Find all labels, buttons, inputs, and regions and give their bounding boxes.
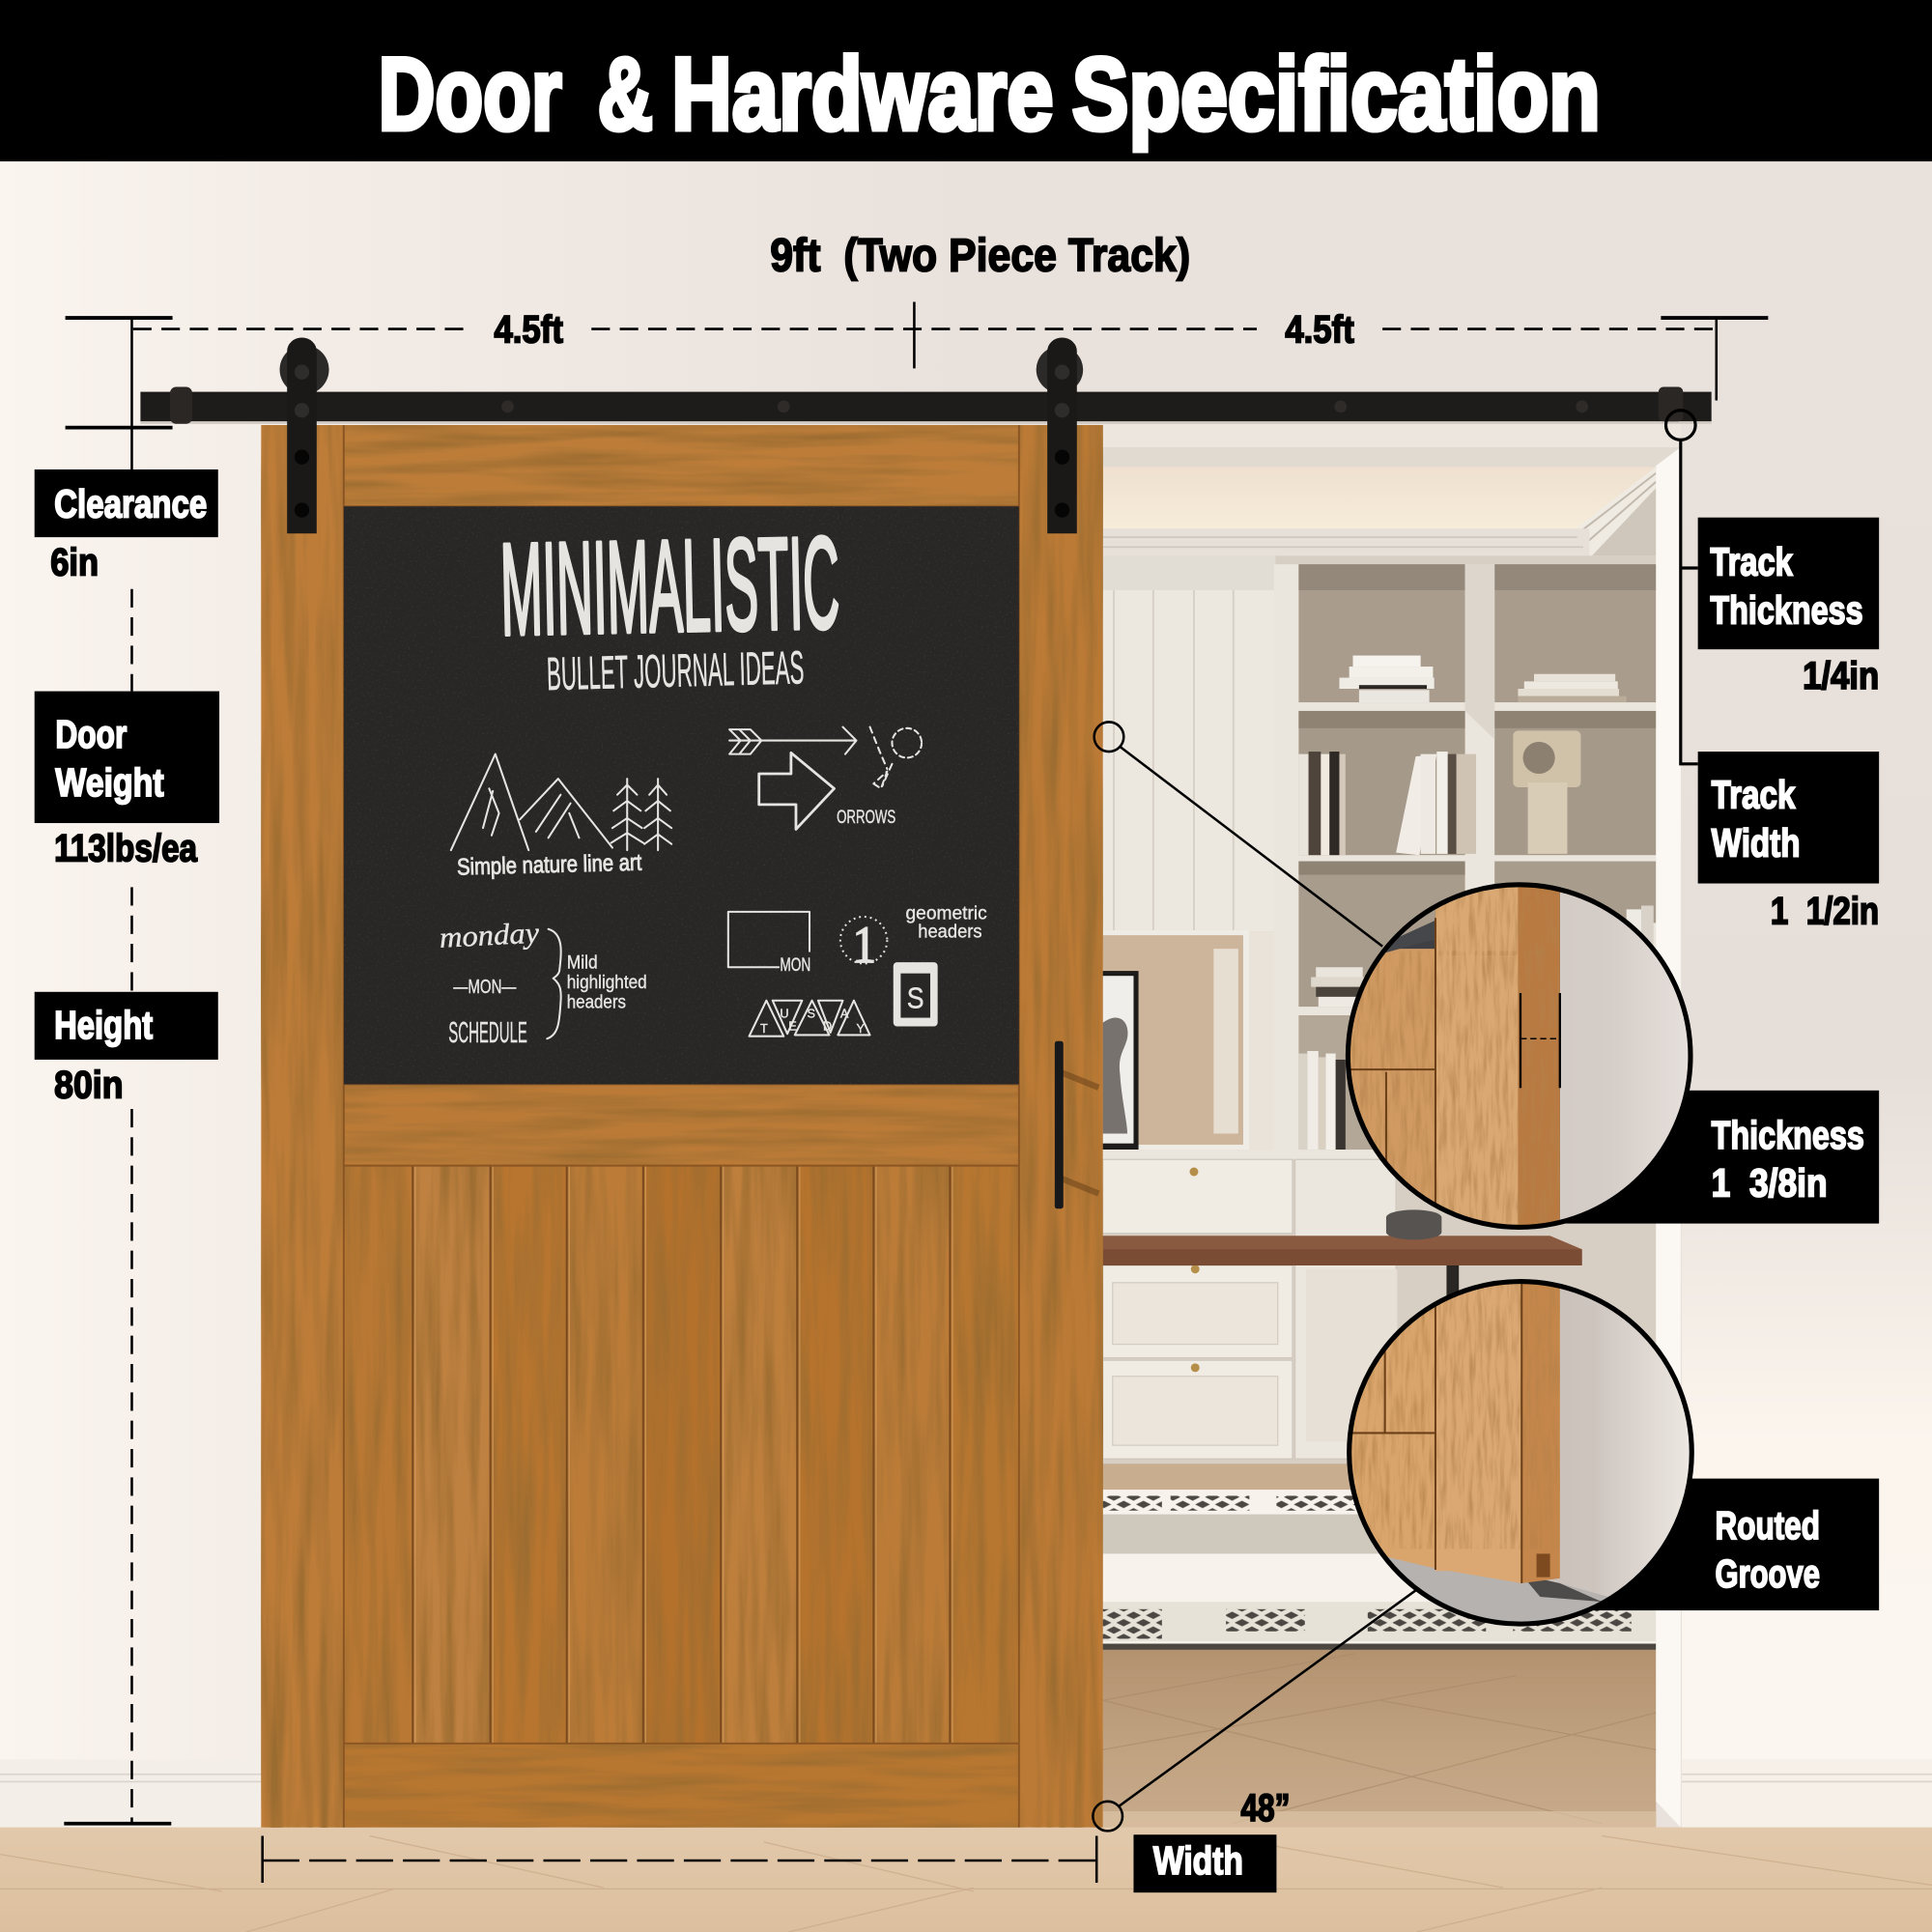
title banner: & bbox=[598, 36, 653, 152]
door trim bbox=[1656, 447, 1681, 1828]
label: clearance: Clearance bbox=[54, 482, 207, 526]
label: track width bbox=[1698, 752, 1879, 933]
right hanger bbox=[1037, 337, 1083, 533]
chalk arrows bbox=[729, 727, 922, 829]
leader: track callouts bbox=[1665, 411, 1698, 764]
cabinets and drawers bbox=[1103, 1150, 1399, 1459]
label: door weight: Door bbox=[55, 712, 127, 756]
chalk note: highlighted headers: Mild bbox=[567, 953, 598, 974]
label: track thickness: Thickness bbox=[1710, 587, 1863, 632]
baseboards bbox=[0, 1759, 1932, 1828]
dimension: door width bbox=[263, 1836, 1096, 1883]
detail circle: door thickness bbox=[1343, 881, 1700, 1233]
label: left track section: 4.5ft bbox=[494, 309, 563, 352]
left hanger bbox=[280, 337, 329, 533]
chalk note: highlighted headers: highlighted bbox=[567, 973, 647, 993]
label: clearance: 6in bbox=[50, 542, 99, 584]
title banner bbox=[0, 0, 1932, 161]
door handle bbox=[1055, 1041, 1100, 1208]
chalk geometric headers: headers bbox=[918, 923, 982, 943]
label: track width: Track bbox=[1712, 773, 1796, 817]
top rail bbox=[344, 425, 1019, 506]
chalkboard: BULLET JOURNAL IDEAS bbox=[546, 641, 805, 700]
label: height bbox=[35, 992, 218, 1106]
chalk note: highlighted headers bbox=[567, 953, 647, 1012]
chalk bunting: TUESDAY: E bbox=[788, 1018, 797, 1033]
dimension: clearance and height bbox=[64, 318, 173, 1824]
label: track thickness: Track bbox=[1710, 540, 1793, 584]
chalk bunting: TUESDAY: S bbox=[807, 1007, 815, 1021]
label: track thickness bbox=[1698, 518, 1879, 697]
chalk geometric headers bbox=[728, 904, 987, 1026]
chalk brace bbox=[547, 929, 561, 1038]
bookshelf bbox=[1274, 564, 1656, 1153]
dimension: track length bbox=[133, 301, 1768, 401]
chalk geometric headers: MON bbox=[780, 955, 810, 976]
shelf books and ornaments bbox=[1298, 656, 1654, 1150]
label: clearance bbox=[35, 469, 218, 584]
wood floor bbox=[0, 1828, 1932, 1932]
title banner: Hardware bbox=[671, 36, 1054, 152]
chalkboard bbox=[344, 506, 1019, 1084]
plank panels bbox=[344, 1166, 1019, 1744]
chalk bunting: TUESDAY: T bbox=[760, 1021, 768, 1036]
rug and room floor bbox=[1103, 1463, 1656, 1828]
chalk caption: nature: Simple nature line art bbox=[457, 850, 642, 881]
label: thickness: Thickness bbox=[1712, 1113, 1864, 1157]
label: track width: 1 1/2in bbox=[1771, 891, 1879, 933]
room seen through the opening bbox=[1103, 421, 1681, 1828]
label: routed groove: Routed bbox=[1716, 1503, 1820, 1548]
chalk geometric headers: S bbox=[907, 981, 924, 1014]
chalk mountains and trees bbox=[451, 754, 671, 850]
leader: groove detail bbox=[1093, 1589, 1417, 1831]
label: width bbox=[1133, 1787, 1290, 1892]
framed art bbox=[1103, 930, 1249, 1150]
chalk bunting: TUESDAY: Y bbox=[856, 1021, 865, 1036]
title banner: Door bbox=[379, 36, 562, 152]
chalkboard: MINIMALISTIC bbox=[499, 510, 840, 663]
detail circle: routed groove bbox=[1343, 1275, 1700, 1633]
chalkboard: SCHEDULE bbox=[448, 1016, 527, 1049]
sliding track bbox=[140, 387, 1712, 424]
label: right track section: 4.5ft bbox=[1285, 309, 1354, 352]
chalk bunting: TUESDAY: U bbox=[780, 1007, 789, 1021]
chalk lettering: monday: monday bbox=[439, 916, 540, 954]
bottom rail bbox=[344, 1744, 1019, 1828]
label: door weight bbox=[35, 692, 219, 870]
chalk geometric headers: geometric bbox=[906, 904, 987, 924]
label: track width: Width bbox=[1712, 820, 1801, 865]
chalk bunting: TUESDAY: A bbox=[840, 1007, 849, 1021]
label: thickness bbox=[1565, 1091, 1879, 1224]
label: routed groove bbox=[1589, 1479, 1879, 1610]
title banner: Specification bbox=[1072, 36, 1601, 152]
middle rail bbox=[344, 1084, 1019, 1166]
label: thickness: 1 3/8in bbox=[1712, 1161, 1828, 1206]
chalk bunting: TUESDAY bbox=[750, 1001, 870, 1037]
label: width: 48” bbox=[1240, 1787, 1290, 1830]
chalk geometric headers: 1 bbox=[853, 916, 876, 974]
chalk bunting: TUESDAY: D bbox=[823, 1018, 832, 1033]
chalk caption: arrows: ORROWS bbox=[837, 808, 895, 828]
label: height: Height bbox=[54, 1003, 153, 1047]
chalk note: highlighted headers: headers bbox=[567, 992, 626, 1012]
label: routed groove: Groove bbox=[1716, 1551, 1820, 1596]
label: width: Width bbox=[1153, 1838, 1243, 1883]
label: height: 80in bbox=[54, 1064, 124, 1106]
chalk lettering: MON: —MON— bbox=[453, 977, 517, 998]
label: track thickness: 1/4in bbox=[1803, 655, 1879, 697]
desk and cup bbox=[1103, 1209, 1582, 1296]
leader: thickness detail bbox=[1094, 722, 1382, 947]
label: door weight: Weight bbox=[55, 760, 164, 805]
label: door weight: 113lbs/ea bbox=[54, 828, 198, 870]
barn door bbox=[261, 425, 1103, 1828]
label: total track length: 9ft (Two Piece Track) bbox=[770, 230, 1190, 282]
